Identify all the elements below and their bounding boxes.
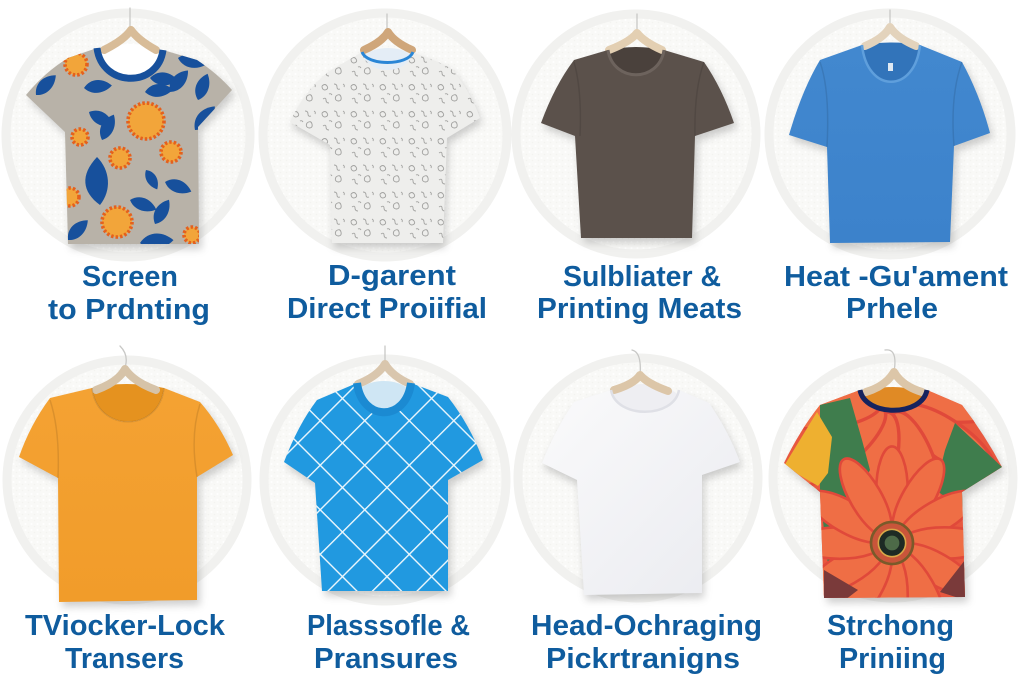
neck tag — [888, 63, 893, 71]
label: Strchong — [827, 610, 954, 642]
label — [537, 261, 742, 325]
label — [48, 261, 210, 326]
panel: plastisol — [264, 346, 506, 675]
label — [784, 261, 1008, 325]
neck opening — [608, 47, 664, 75]
panel: transfers — [7, 346, 247, 675]
panel: direct to garment — [263, 13, 507, 325]
label — [287, 260, 487, 325]
hanger — [96, 346, 156, 390]
hanger — [104, 8, 156, 50]
t-shirt: white — [542, 390, 740, 595]
neck opening — [98, 44, 162, 76]
shirt shadow — [22, 393, 236, 607]
backdrop circle — [264, 359, 506, 601]
panel: heat transfer — [769, 10, 1011, 325]
t-shirt: sunflower print — [784, 390, 1002, 598]
panel: stretch printing — [767, 350, 1016, 675]
shirt shadow — [787, 395, 1005, 603]
neck opening — [861, 387, 925, 409]
backdrop circle — [7, 360, 247, 600]
label: Heat -Gu'ament — [784, 261, 1008, 293]
hanger — [609, 14, 662, 50]
backdrop circle — [6, 13, 250, 257]
label: Printing Meats — [537, 293, 742, 325]
shirt shadow — [292, 57, 482, 248]
hanger — [358, 346, 410, 384]
backdrop circle — [263, 13, 507, 257]
neck opening — [612, 384, 678, 412]
shirt shadow — [287, 388, 486, 596]
panel: screen printing — [6, 8, 250, 326]
neck opening — [363, 48, 413, 72]
shirt shadow — [792, 50, 993, 248]
label: Sulbliater & — [563, 261, 721, 293]
label — [827, 610, 954, 675]
t-shirt: charcoal — [541, 50, 734, 238]
t-shirt: doodle print — [290, 52, 480, 243]
side foliage — [820, 398, 870, 565]
shirt shadow — [544, 395, 742, 600]
bottom flower petals — [817, 445, 966, 598]
label: Head-Ochraging — [531, 610, 762, 642]
backdrop circle — [769, 13, 1011, 255]
t-shirt: blue — [789, 45, 990, 243]
shirt shadow — [544, 55, 737, 243]
label: Screen — [82, 261, 178, 293]
hanger — [364, 14, 412, 50]
label: Direct Proiifial — [287, 293, 487, 325]
label: Prhele — [846, 293, 938, 325]
label: Pickrtranigns — [546, 643, 740, 675]
hanger — [614, 350, 668, 391]
label: Plasssofle & — [307, 610, 470, 642]
backdrop circle — [518, 358, 758, 598]
label: Pransures — [314, 643, 458, 675]
label: D-garent — [328, 260, 456, 292]
t-shirt: floral print — [26, 48, 232, 250]
label: TViocker-Lock — [25, 610, 226, 642]
label — [25, 610, 226, 675]
label — [307, 610, 470, 675]
panel: sublimation — [516, 14, 756, 325]
hanger — [865, 10, 916, 46]
neck opening — [862, 42, 920, 82]
shirt shadow — [29, 53, 235, 249]
neck opening — [92, 384, 164, 422]
label — [531, 610, 762, 675]
backdrop circle — [773, 358, 1013, 598]
top flower petals — [794, 390, 997, 498]
hanger — [866, 350, 922, 392]
backdrop circle — [516, 14, 756, 254]
label: Priniing — [839, 643, 946, 675]
t-shirt: orange — [19, 388, 233, 602]
t-shirt: blue lattice — [284, 383, 483, 591]
neck opening — [357, 381, 411, 411]
panel: heat charging — [518, 350, 762, 675]
label: Transers — [65, 643, 184, 675]
label: to Prdnting — [48, 294, 210, 326]
